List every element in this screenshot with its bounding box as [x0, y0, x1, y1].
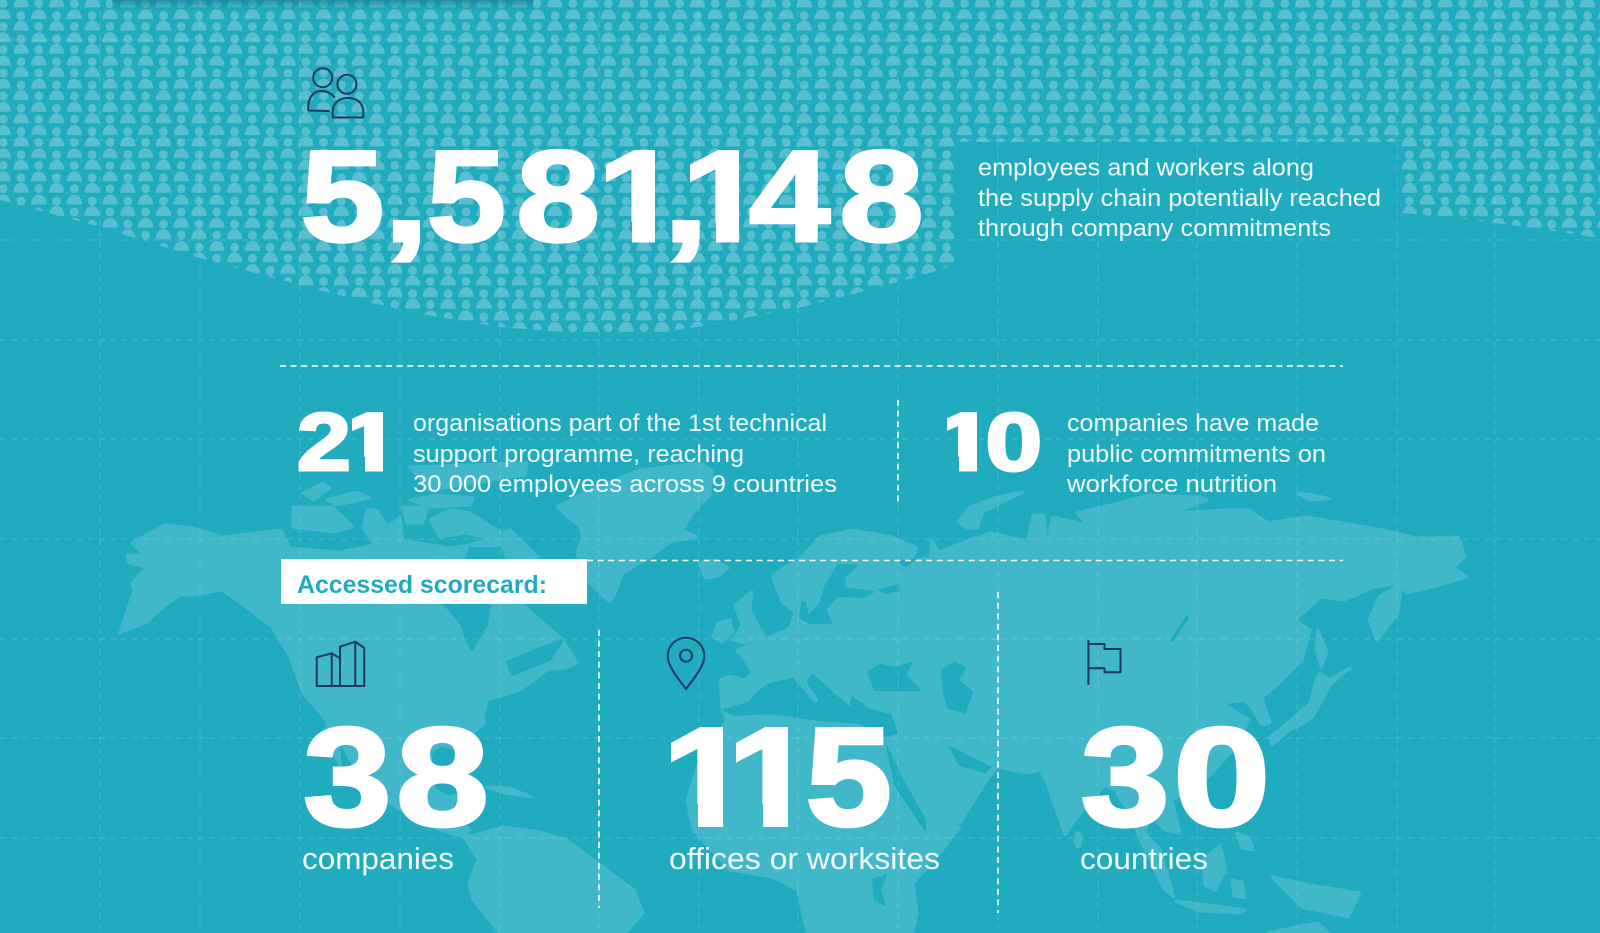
- divider top: [280, 365, 1343, 367]
- divider column 2: [997, 592, 999, 913]
- stat: 30 countries: 3: [1081, 699, 1169, 855]
- icon: flag: [1088, 641, 1120, 684]
- headline description: employees and workers along: [978, 154, 1314, 182]
- stat: 21: 2: [297, 397, 351, 488]
- stat: 115 offices: 1: [661, 699, 754, 855]
- headline number: 1: [680, 123, 769, 269]
- stat: 10: 0: [986, 395, 1042, 488]
- top shadow strip: [112, 0, 533, 10]
- headline number: 8: [839, 123, 924, 269]
- stat: 21: [298, 412, 383, 472]
- stat: 38 companies: [302, 698, 489, 876]
- icon: location pin: [668, 638, 704, 689]
- headline number: 1: [596, 123, 685, 269]
- stat: 30 countries: countries: [1080, 841, 1208, 876]
- headline description: through company commitments: [978, 215, 1331, 242]
- headline description: the supply chain potentially reached: [978, 185, 1381, 212]
- headline number: 4: [749, 124, 830, 269]
- stat: 10: [947, 412, 1040, 472]
- text: organisations: [413, 410, 837, 498]
- stat: 115 offices: [670, 727, 939, 870]
- stat: 115 offices: 1: [726, 699, 819, 855]
- scorecard label: [281, 559, 587, 604]
- divider column 1: [598, 630, 600, 908]
- text: companies commitments: [1066, 410, 1326, 498]
- text: organisations: organisations part of the 1st technical: [413, 410, 827, 437]
- divider vertical middle: [897, 400, 899, 505]
- stat: 115 offices: 5: [806, 700, 892, 855]
- divider scorecard: [587, 560, 1343, 562]
- text: organisations: support programme, reaching: [413, 441, 744, 468]
- stat: 38 companies: companies: [302, 841, 454, 876]
- headline number: 5: [427, 124, 506, 269]
- headline number: 8: [516, 124, 600, 269]
- stat: 30 countries: 0: [1174, 699, 1270, 855]
- headline number: 5: [300, 124, 384, 269]
- text: companies commitments: public commitments on: [1067, 441, 1326, 468]
- scorecard label: Accessed scorecard:: [297, 571, 547, 599]
- text: companies commitments: companies have made: [1067, 410, 1319, 437]
- stat: 10: 1: [932, 396, 999, 488]
- headline description: [978, 154, 1381, 242]
- headline number: ,: [383, 124, 429, 269]
- stat: 38 companies: 3: [304, 698, 391, 855]
- stat: 115 offices: offices or worksites: [669, 841, 940, 876]
- text: organisations: 30 000 employees across 9 countries: [413, 471, 837, 498]
- stat: 21: 1: [338, 396, 405, 488]
- icon: buildings: [317, 642, 364, 686]
- headline number: [303, 148, 921, 263]
- world map: [120, 463, 1467, 933]
- headline number: ,: [663, 124, 709, 269]
- stat: 38 companies: 8: [396, 699, 489, 855]
- text: companies commitments: workforce nutrition: [1066, 471, 1277, 498]
- stat: 30 countries: [1080, 699, 1270, 876]
- people pattern backdrop: [0, 0, 1600, 333]
- icon: people: [308, 68, 363, 118]
